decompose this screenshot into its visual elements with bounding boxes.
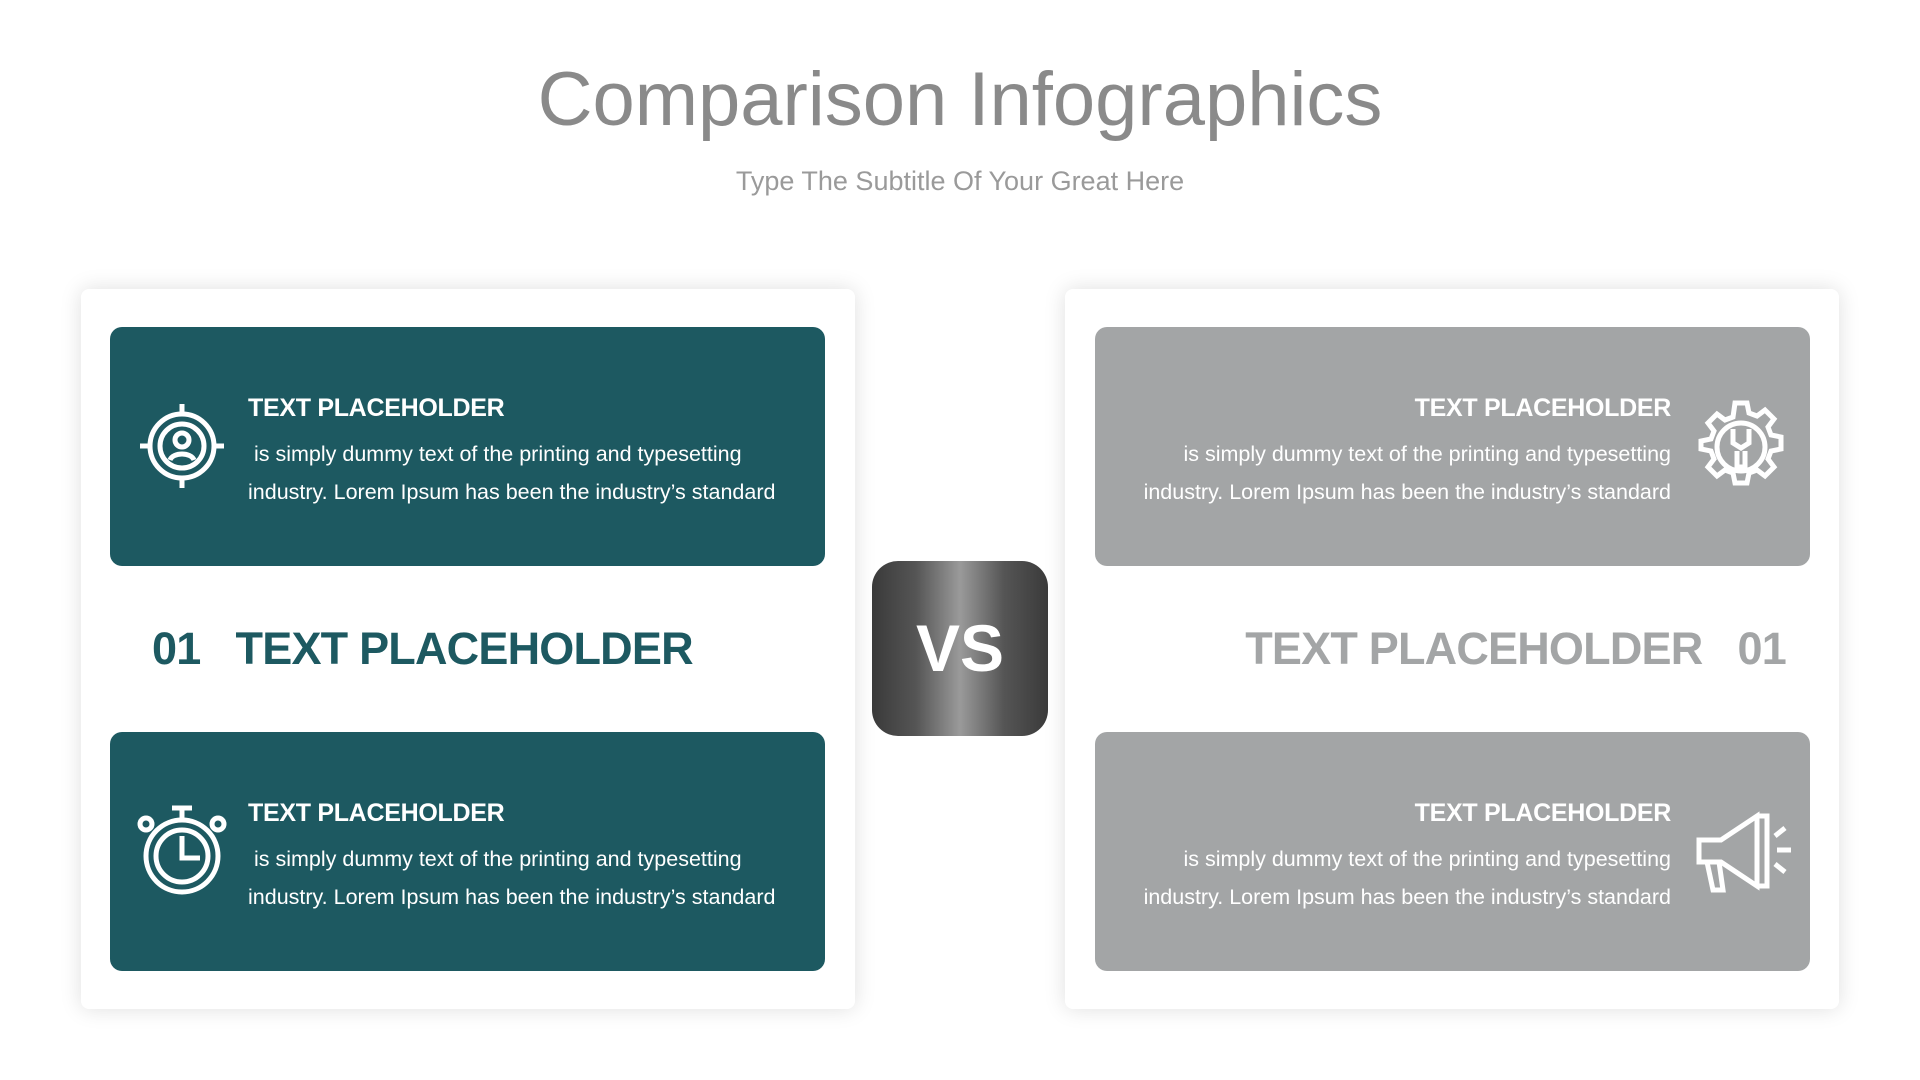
vs badge <box>872 561 1048 736</box>
box: right top: TEXT PLACEHOLDER <box>1415 394 1671 422</box>
box: left top: industry. Lorem Ipsum has been the industry’s standard <box>248 480 775 504</box>
vs badge: VS <box>916 611 1004 685</box>
box: right bottom: industry. Lorem Ipsum has been the industry’s standard <box>1144 885 1671 909</box>
box: left top: is simply dummy text of the printing and typesetting <box>254 442 742 466</box>
heading: left middle: 01 TEXT PLACEHOLDER <box>152 623 693 674</box>
box: right bottom: TEXT PLACEHOLDER <box>1415 799 1671 827</box>
box: right top: industry. Lorem Ipsum has been the industry’s standard <box>1144 480 1671 504</box>
icon: gear wrench <box>1698 400 1784 486</box>
panel: left <box>81 289 855 1009</box>
box: left bottom <box>110 732 825 971</box>
icon: megaphone <box>1696 812 1791 892</box>
box: left bottom: industry. Lorem Ipsum has been the industry’s standard <box>248 885 775 909</box>
box: right bottom: is simply dummy text of the printing and typesetting <box>1183 847 1671 871</box>
icon: stopwatch <box>138 806 226 894</box>
box: left bottom: TEXT PLACEHOLDER <box>248 799 504 827</box>
panel: right <box>1065 289 1839 1009</box>
box: right bottom <box>1095 732 1810 971</box>
heading: right middle: TEXT PLACEHOLDER 01 <box>1245 623 1786 674</box>
box: left bottom: is simply dummy text of the printing and typesetting <box>254 847 742 871</box>
box: right top <box>1095 327 1810 566</box>
box: left top <box>110 327 825 566</box>
icon: target <box>140 404 224 488</box>
subtitle: Type The Subtitle Of Your Great Here <box>736 166 1184 196</box>
box: right top: is simply dummy text of the printing and typesetting <box>1183 442 1671 466</box>
title: Comparison Infographics <box>538 57 1382 142</box>
box: left top: TEXT PLACEHOLDER <box>248 394 504 422</box>
